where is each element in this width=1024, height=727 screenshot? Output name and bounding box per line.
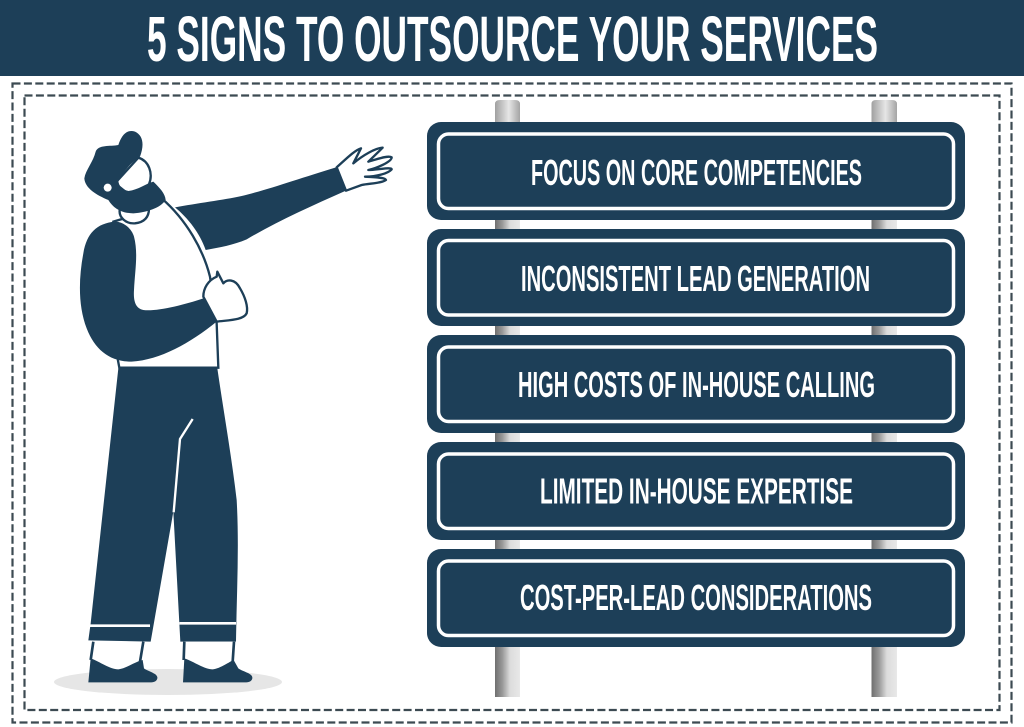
header banner xyxy=(0,0,1024,76)
sign 5 xyxy=(427,549,965,647)
sign 1 xyxy=(427,122,965,220)
hair and beard xyxy=(84,131,166,213)
ear xyxy=(104,184,112,192)
head xyxy=(84,131,166,223)
sign 4 xyxy=(427,442,965,540)
open hand xyxy=(337,148,392,191)
upper body xyxy=(80,148,392,368)
figure: man pointing at signs xyxy=(80,131,392,682)
fist xyxy=(203,272,247,322)
signpost: right pole xyxy=(872,100,897,697)
face xyxy=(115,158,151,197)
sign 3 xyxy=(427,335,965,433)
torso xyxy=(113,198,218,368)
neck xyxy=(120,208,149,223)
ground shadow xyxy=(54,669,282,695)
lower body: trousers and shoes xyxy=(88,368,252,682)
bent arm xyxy=(80,222,217,362)
signpost: left pole xyxy=(495,100,520,697)
pointing arm xyxy=(175,167,346,250)
sign 2 xyxy=(427,229,965,326)
